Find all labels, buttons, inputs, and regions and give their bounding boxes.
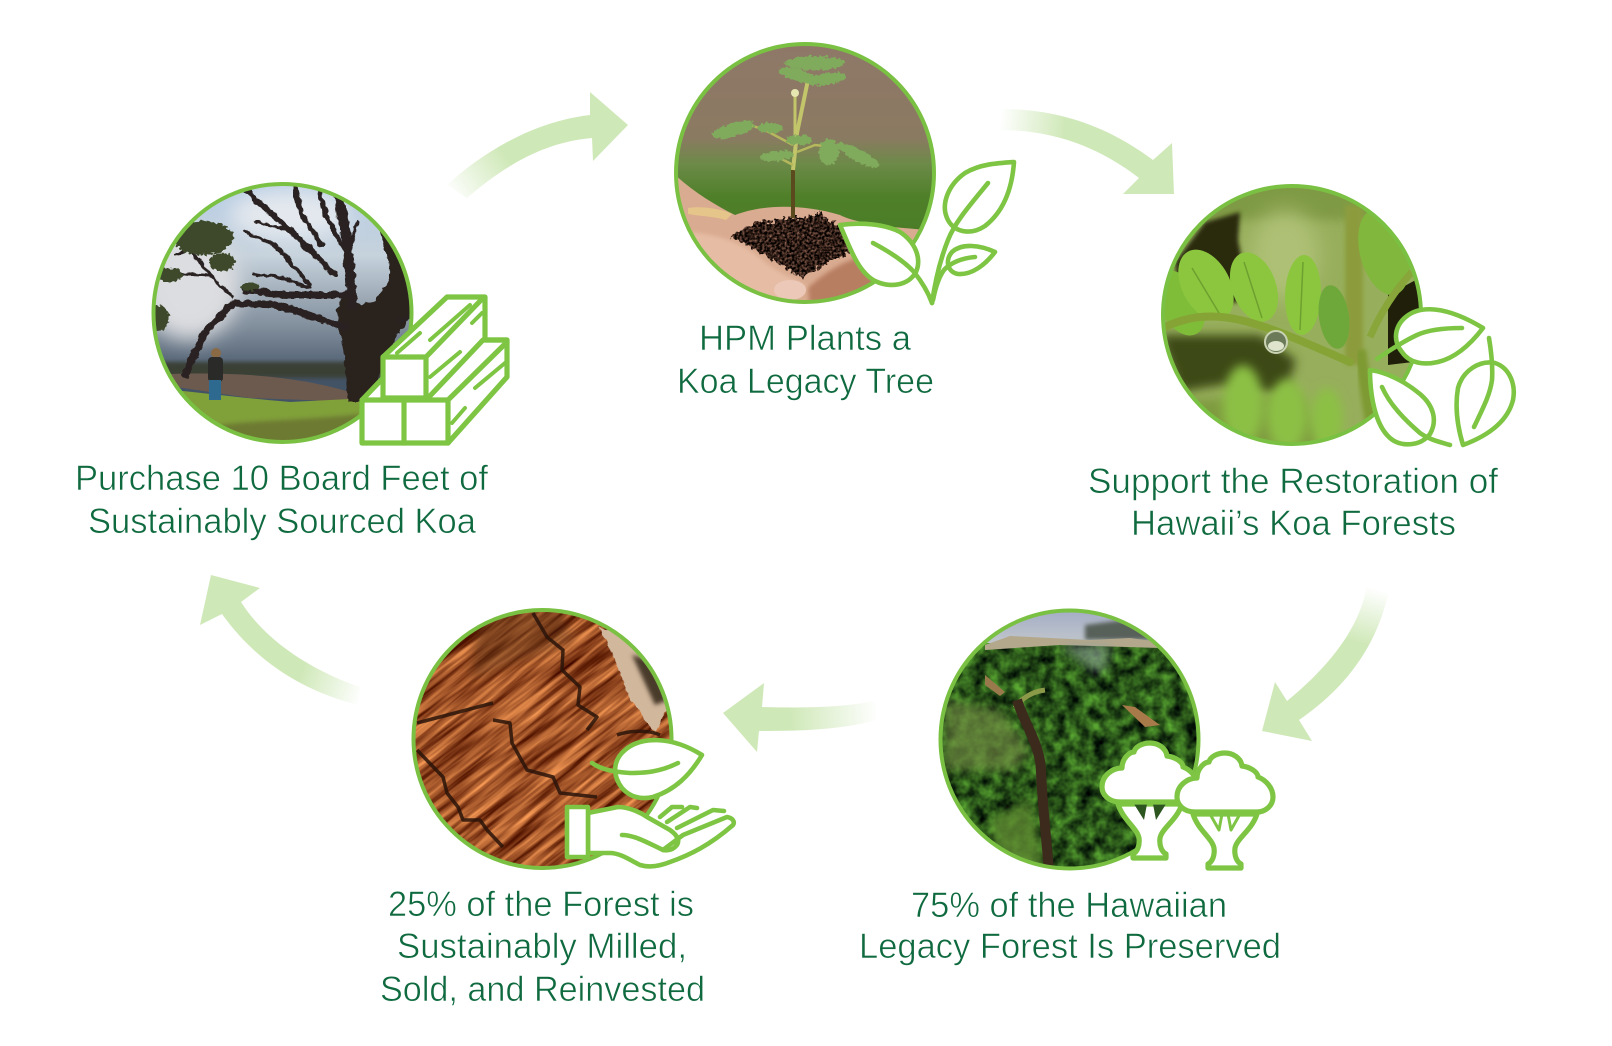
ring — [1163, 186, 1421, 444]
panel: HPM plants a koa legacy tree — [670, 40, 1014, 401]
arrow: restoration to preserved forest — [1262, 585, 1390, 741]
icon: sprouting leaves — [840, 162, 1014, 303]
arrow: milled forest to purchase — [200, 575, 360, 705]
caption — [1088, 462, 1498, 543]
caption: Sustainably Milled, — [397, 927, 687, 966]
caption — [677, 319, 934, 401]
caption: Support the Restoration of — [1088, 462, 1498, 501]
icon: three leaves — [1370, 309, 1514, 445]
arrow: seedling to restoration — [997, 109, 1174, 194]
caption: 75% of the Hawaiian — [911, 886, 1227, 925]
caption: Purchase 10 Board Feet of — [75, 459, 488, 498]
ring — [940, 610, 1198, 868]
panel: purchase board feet — [75, 180, 507, 541]
photo: koa wood grain — [416, 612, 670, 866]
caption: Sold, and Reinvested — [380, 970, 705, 1009]
caption: HPM Plants a — [699, 319, 912, 358]
icon: two trees — [1102, 743, 1273, 868]
photo: aerial forest — [942, 612, 1196, 866]
caption: Sustainably Sourced Koa — [88, 502, 477, 541]
arrow: preserved forest to milled forest — [723, 683, 877, 752]
caption: Legacy Forest Is Preserved — [859, 927, 1281, 966]
tree two — [1177, 753, 1273, 868]
panel: support the restoration — [1088, 175, 1514, 543]
caption: Hawaii’s Koa Forests — [1131, 504, 1456, 543]
caption — [859, 886, 1281, 966]
tree one — [1102, 743, 1198, 858]
arrow: tree to seedling — [447, 92, 628, 198]
photo: koa tree and person in field — [156, 186, 410, 440]
icon: hand holding leaf — [567, 740, 734, 866]
caption — [75, 459, 488, 541]
ring — [676, 44, 934, 302]
icon: stacked lumber — [362, 297, 507, 443]
photo: koa leaf with water drop — [1165, 188, 1419, 442]
ring — [154, 184, 412, 442]
panel: sustainably milled — [382, 608, 736, 1006]
panel: legacy forest preserved — [859, 605, 1281, 966]
caption: Koa Legacy Tree — [677, 362, 934, 401]
caption: 25% of the Forest is — [388, 885, 694, 924]
ring — [414, 610, 672, 868]
caption — [380, 885, 705, 1009]
photo: seedling in cupped hands — [678, 46, 932, 300]
